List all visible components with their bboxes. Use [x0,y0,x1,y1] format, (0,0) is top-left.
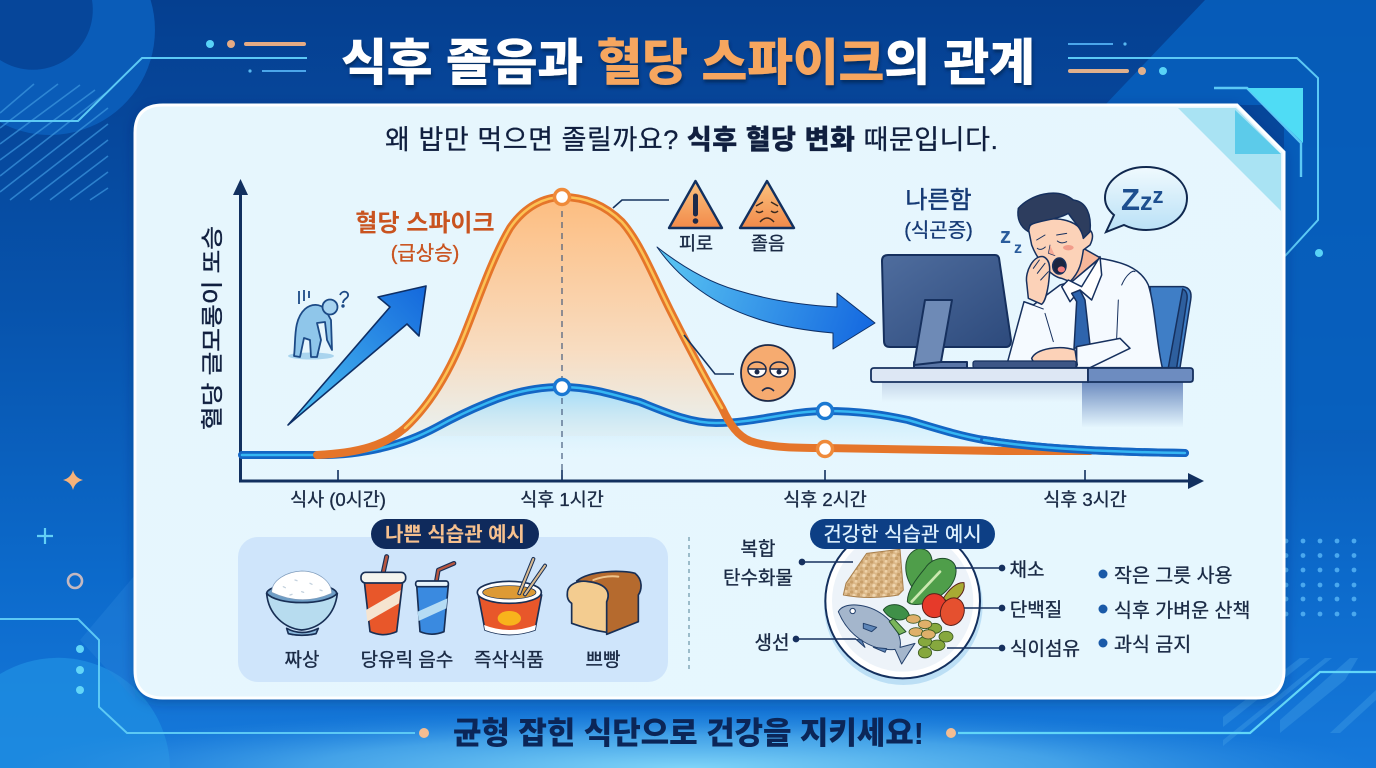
icon: sleepy face [741,345,795,401]
peak markers [554,190,832,456]
spike area fill [405,197,740,436]
arrow: rising [288,286,426,425]
food: broccoli [883,605,909,635]
icon: plus [37,528,53,544]
blue curve over orange [984,440,1185,453]
x axis labels: 식후 3시간 [1043,489,1127,510]
spike label: 혈당 스파이크 [355,210,495,237]
speech bubble: Zzz: Zz [1121,182,1152,217]
x axis labels: 식후 1시간 [520,489,604,510]
healthy tips list [1098,565,1250,656]
keyboard [973,361,1076,368]
callout leader lines [613,200,734,374]
stable area fill [360,387,1040,458]
spike label: (급상승) [391,242,459,265]
page fold corner [1178,108,1281,211]
small zz: z [1014,240,1022,257]
worker [1006,193,1191,368]
healthy tips list: 식후 가벼운 산책 [1114,600,1250,622]
monitor [882,255,1011,368]
icon: tired person [288,290,348,360]
food: greens [906,549,956,605]
panel: healthy habits [723,519,1250,685]
y axis label: 혈당 글모롱이 또승 [200,226,225,430]
speech bubble: Zzz: z [1152,183,1163,208]
food: fish [838,605,915,664]
illustration: yawning worker at desk [871,193,1193,427]
dashed guide [561,200,563,480]
small zz: z [1000,223,1011,248]
x axis labels [290,489,1127,510]
y axis [239,192,242,480]
chart: blood sugar curves [233,179,1204,489]
plate labels: 식이섬유 [1010,638,1080,660]
plate labels: 복합 [741,538,775,560]
healthy tips list: 과식 금지 [1114,634,1191,656]
orange curve [317,197,1090,455]
blue curve [242,387,1185,455]
icon: drowsy warning [740,181,794,228]
x axis labels: 식사 (0시간) [290,489,386,510]
plate labels: 탄수화물 [723,567,793,589]
x axis [239,480,1192,482]
food: whole grain [843,549,903,597]
pill: healthy habits: 건강한 식습관 예시 [823,523,982,546]
desk legs [882,382,1183,427]
icon: blue soda [416,563,454,634]
plate labels: 생선 [755,632,789,654]
icon: fatigue warning [669,181,722,228]
pill: bad habits [371,519,539,549]
label: drowsiness: 나른함 [905,187,972,214]
icon: red soda [361,557,406,635]
icon: rice bowl [267,571,337,635]
x axis labels: 식후 2시간 [783,489,867,510]
icon: bread [567,571,641,634]
icon: instant noodles [477,559,545,634]
subtitle: 왜 밥만 먹으면 졸릴까요? 식후 혈당 변화 때문입니다. [385,125,998,155]
panel: main card [135,105,1284,698]
food labels: 즉삭식품 [474,649,544,671]
label: drowsiness [904,187,973,242]
icon: sparkle [63,470,83,490]
plate labels: 단백질 [1010,599,1062,621]
food labels: 쁘빵 [586,649,620,671]
footer message: 균형 잡힌 식단으로 건강을 지키세요! [453,716,924,751]
plate labels: 채소 [1010,559,1044,581]
label: drowsiness: (식곤증) [904,219,973,242]
label: drowsy: 졸음 [751,233,785,254]
food: beans [906,615,953,658]
desk top [871,368,1193,382]
food icons [267,557,641,635]
icon: ring [68,574,82,588]
food labels: 짜상 [285,649,319,671]
plate labels [723,538,1080,660]
speech bubble: Zzz [1105,167,1187,232]
y axis arrowhead [233,179,248,195]
x axis arrowhead [1188,473,1204,489]
chair [1150,287,1191,368]
healthy tips list: 작은 그릇 사용 [1114,565,1232,587]
food labels [285,649,620,671]
food labels: 당유릭 음수 [361,649,453,671]
plate callout lines [793,559,1005,651]
panel: bad habits [238,519,668,682]
pill: bad habits: 나쁜 식습관 예시 [385,523,525,546]
food: tomato [922,583,968,629]
label: fatigue: 피로 [679,233,713,254]
title: 식후 졸음과 혈당 스파이크의 관계 [341,35,1035,91]
arrow: curved to worker [657,247,875,349]
spike label [355,210,495,265]
pill: healthy habits [810,519,995,549]
healthy plate [824,524,983,685]
